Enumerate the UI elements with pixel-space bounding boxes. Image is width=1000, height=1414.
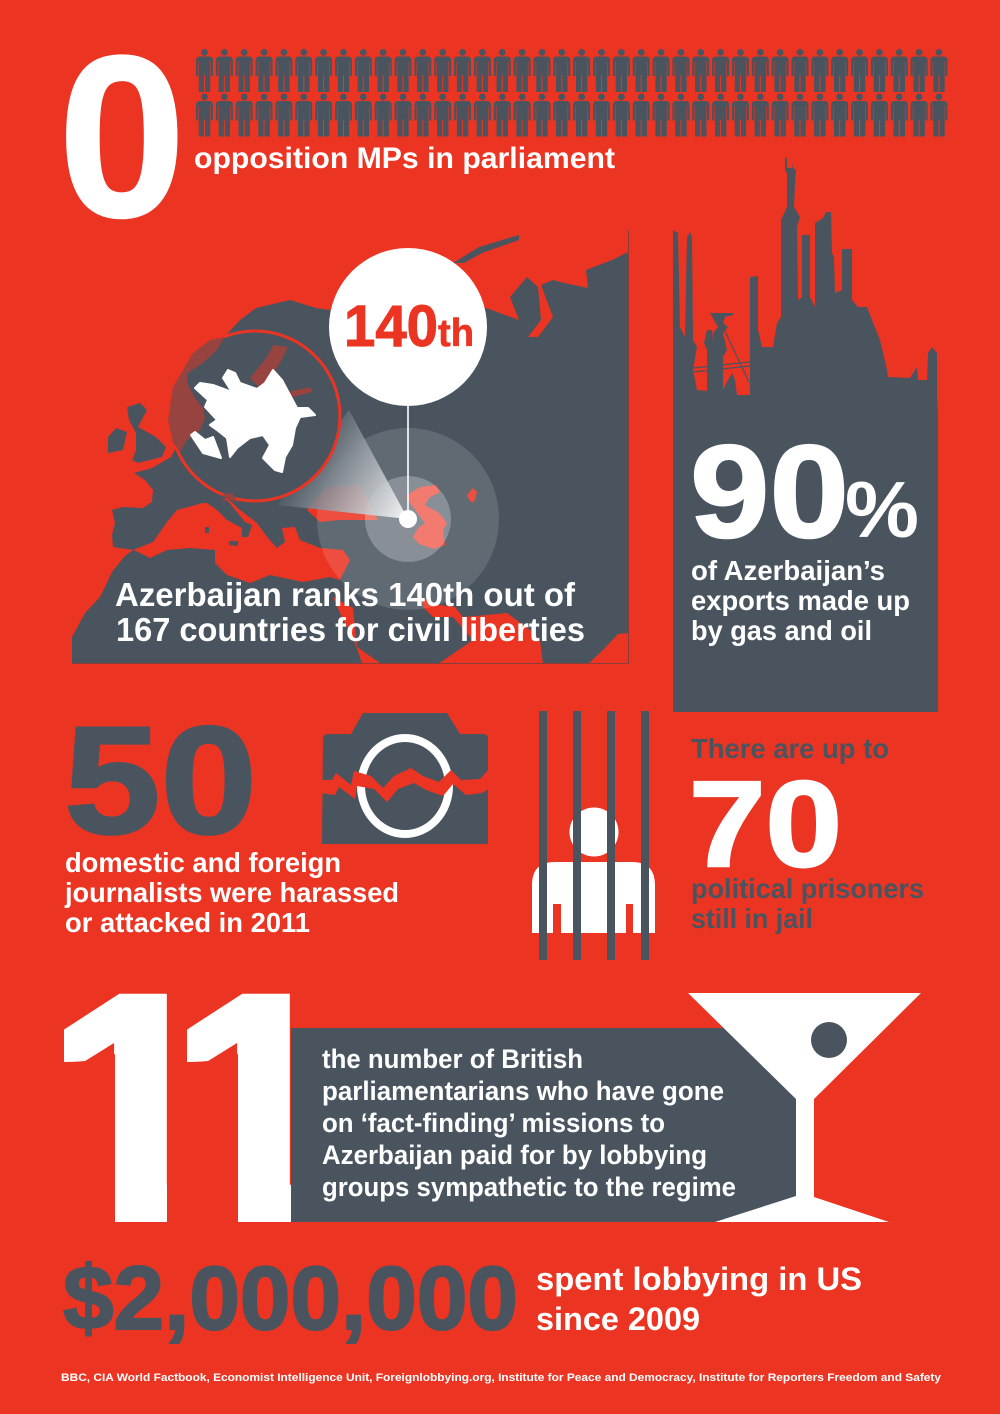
highlight rings around Azerbaijan — [317, 428, 499, 610]
panel text: on ‘fact-finding’ missions to — [322, 1108, 665, 1138]
icon: broken camera — [320, 713, 490, 844]
refinery silhouette — [673, 158, 938, 712]
number 70: 70 — [689, 756, 842, 892]
panel text — [322, 1044, 736, 1202]
dollar figure: $2,000,000 — [63, 1249, 518, 1349]
text: there are up to: There are up to — [691, 733, 889, 764]
map caption: 167 countries for civil liberties — [116, 611, 585, 648]
lobbying caption: since 2009 — [536, 1301, 700, 1337]
big number zero: 0 — [58, 8, 186, 265]
prisoners caption — [691, 873, 924, 934]
panel: lobbying spend — [63, 1249, 862, 1349]
number 50: 50 — [64, 695, 257, 866]
prisoners caption: still in jail — [691, 903, 813, 934]
panel: British parliamentarians — [40, 928, 921, 1292]
panel: journalists — [64, 695, 490, 938]
pipes and wire — [693, 327, 750, 382]
panel: political prisoners — [532, 711, 924, 960]
map caption: Azerbaijan ranks 140th out of — [115, 576, 576, 613]
panel text: parliamentarians who have gone — [322, 1076, 724, 1106]
percent sign: % — [845, 465, 919, 554]
exports caption: of Azerbaijan’s — [691, 555, 885, 586]
sources: BBC, CIA World Factbook, Economist Intelligence Unit, Foreignlobbying.org, Institute for Peace and Democracy, Institute for Reporters Freedom and Safety — [61, 1372, 942, 1384]
percent figure: 90 — [690, 418, 849, 565]
journalists caption: or attacked in 2011 — [65, 907, 310, 938]
panel text: groups sympathetic to the regime — [322, 1172, 736, 1202]
exports caption: by gas and oil — [691, 615, 872, 646]
lobbying caption — [536, 1261, 862, 1337]
map: Italy and Mediterranean islands — [205, 500, 310, 546]
rank bubble — [329, 248, 487, 406]
panel: map of civil liberties — [72, 230, 628, 664]
panel: oil and gas exports — [673, 158, 938, 712]
rank suffix: th — [438, 312, 474, 355]
magnified seas — [168, 337, 312, 502]
location dot — [399, 510, 417, 528]
panel text: the number of British — [322, 1044, 583, 1074]
rank number: 140 — [344, 294, 438, 359]
map islands — [108, 235, 519, 463]
map land — [72, 252, 628, 664]
icon: martini glass — [688, 993, 921, 1222]
panel text: Azerbaijan paid for by lobbying — [322, 1140, 707, 1170]
journalists caption: domestic and foreign — [65, 847, 341, 878]
journalists caption — [64, 847, 399, 938]
map caption — [115, 576, 585, 648]
exports caption — [691, 555, 910, 646]
journalists caption: journalists were harassed — [64, 877, 399, 908]
number 11: 11 — [42, 928, 346, 1292]
map: border lines — [72, 230, 628, 664]
Azerbaijan silhouette — [191, 370, 315, 472]
lobbying caption: spent lobbying in US — [536, 1261, 862, 1297]
map seas — [133, 485, 628, 664]
icon row: 76 MPs — [196, 49, 947, 136]
icon: prisoner behind bars — [532, 711, 655, 960]
heading: opposition MPs: opposition MPs in parliament — [194, 142, 615, 175]
magnifier circle — [168, 331, 340, 502]
prisoners caption: political prisoners — [691, 873, 924, 904]
text panel — [291, 1028, 802, 1222]
pointer line — [407, 405, 409, 519]
exports caption: exports made up — [691, 585, 910, 616]
magnifier beam — [277, 410, 408, 519]
